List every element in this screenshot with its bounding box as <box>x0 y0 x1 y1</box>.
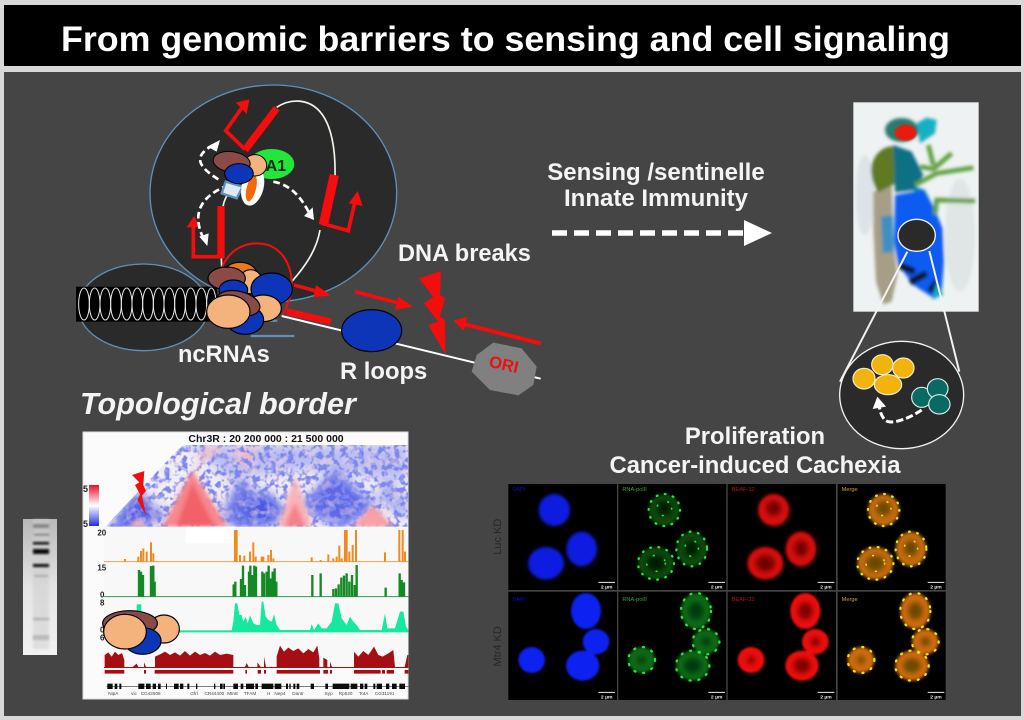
lightning bolt on map <box>132 471 146 516</box>
panel background <box>83 432 408 699</box>
colour scale: 5 <box>83 519 88 529</box>
colour scale <box>83 484 99 529</box>
gene names: MtnE <box>227 691 238 696</box>
chromatin fibre coil <box>76 287 217 322</box>
gene names: Nep4 <box>274 691 286 696</box>
colour scale: 5 <box>83 484 88 494</box>
row 2: RNA-polII: 2 µm <box>711 694 723 700</box>
ORI origin marker <box>472 343 537 395</box>
gene names: Rp520 <box>339 691 353 696</box>
protein complex overlay <box>103 611 179 654</box>
row 2: DAPI: DAPI <box>512 597 526 603</box>
gene names: vic <box>131 691 138 696</box>
gene names: Gfrl <box>190 691 198 696</box>
teal signal track: 0 <box>100 625 105 634</box>
promoter arrow right <box>322 175 363 231</box>
dashed arrows in loop <box>198 140 314 246</box>
promoter arrow top <box>226 99 277 150</box>
panel: immunofluorescence micrographs <box>492 484 946 700</box>
inset circle <box>840 341 964 449</box>
label: ncRNAs: ncRNAs <box>178 342 270 368</box>
row 1: DAPI: 2 µm <box>601 584 613 590</box>
genomic coordinates heading: Chr3R : 20 200 000 : 21 500 000 <box>188 433 344 445</box>
label: DNA breaks: DNA breaks <box>398 241 531 267</box>
label: R loops: R loops <box>340 358 427 385</box>
row 1: DAPI <box>508 484 617 590</box>
orange signal track: 20 <box>97 528 107 537</box>
teal signal track <box>100 598 408 642</box>
panel: gel image <box>23 519 57 655</box>
panel: Hi-C and genomic tracks <box>83 432 410 699</box>
gene names: CG31191 <box>375 691 395 696</box>
green signal track: 15 <box>97 563 107 572</box>
gene names: TFAM <box>244 691 256 696</box>
label: cancer-induced cachexia: Cancer-induced Cachexia <box>610 452 901 479</box>
row 2: DAPI: 2 µm <box>601 694 613 700</box>
green signal track <box>97 563 408 600</box>
heading: topological border: Topological border <box>80 387 358 421</box>
orange signal track <box>97 528 408 562</box>
row labels: Mtr4 KD <box>492 626 504 666</box>
row 2: Merge <box>838 592 946 700</box>
gene names: Syp <box>325 691 333 696</box>
row 2: DAPI <box>508 592 617 700</box>
red arrows towards break <box>294 285 541 343</box>
Hi-C heat map <box>100 445 410 532</box>
row 1: RNA-polII: RNA-polII <box>622 487 647 493</box>
R loop blue ellipse <box>342 310 402 352</box>
label: sensing: Sensing /sentinelle <box>547 159 765 186</box>
yellow cells <box>853 355 914 395</box>
red RNA arc <box>222 243 292 317</box>
row 2: RNA-polII: RNA-polII <box>622 597 647 603</box>
DNA loop strand <box>221 101 335 282</box>
row 2: BEAF-32: BEAF-32 <box>732 597 755 603</box>
row 2: BEAF-32: 2 µm <box>820 694 832 700</box>
row 1: BEAF-32: BEAF-32 <box>732 487 755 493</box>
upper protein complex: A1 <box>266 158 286 175</box>
row 2: Merge: Merge <box>842 597 858 603</box>
tracks and annotation <box>97 471 408 696</box>
row 1: RNA-polII: 2 µm <box>711 584 723 590</box>
label: proliferation: Proliferation <box>685 423 825 450</box>
gene names: TotA <box>359 691 369 696</box>
row labels: Luc KD <box>492 519 504 555</box>
upper protein complex <box>212 149 294 208</box>
red thick gene segment <box>287 312 331 322</box>
gene names: NipA <box>108 691 119 696</box>
panel: genomic looping diagram <box>76 85 541 395</box>
label: innate immunity: Innate Immunity <box>564 185 749 212</box>
gene names: Dantr <box>292 691 304 696</box>
gene models <box>107 684 408 689</box>
title: From genomic barriers to sensing and cell signaling <box>61 20 950 59</box>
teal signal track: 6 <box>100 633 105 642</box>
ORI origin marker: ORI <box>487 352 520 377</box>
row 2: RNA-polII <box>618 592 726 700</box>
loop domain circle <box>150 85 397 302</box>
panel: fly with inset <box>840 102 979 449</box>
differentiation dashed arrow <box>873 397 922 422</box>
dark red signal track <box>104 646 408 674</box>
row 1: Merge: 2 µm <box>930 584 942 590</box>
arrow: dashed to fly <box>552 220 772 246</box>
insulated domain ellipse <box>78 264 208 351</box>
ncRNA marks <box>251 321 294 336</box>
lower protein complex <box>207 262 292 334</box>
row 1: Merge: Merge <box>842 487 858 493</box>
row 1: DAPI: DAPI <box>512 487 526 493</box>
row 2: BEAF-32 <box>728 592 836 700</box>
row 1: BEAF-32 <box>728 484 836 590</box>
row 1: Merge <box>838 484 946 590</box>
abdomen cell marker <box>898 219 935 251</box>
teal signal track: 8 <box>100 598 105 607</box>
row 2: Merge: 2 µm <box>930 694 942 700</box>
fly photograph <box>853 102 979 312</box>
row 1: BEAF-32: 2 µm <box>820 584 832 590</box>
row 1: RNA-polII <box>618 484 726 590</box>
zoom lines <box>840 251 959 382</box>
gene names <box>108 691 395 696</box>
lightning bolt <box>419 271 445 354</box>
green signal track: 0 <box>100 591 105 600</box>
row labels <box>492 519 504 666</box>
gene names: CR44400 <box>204 691 225 696</box>
promoter arrow left <box>187 206 222 258</box>
gene names: CG42608 <box>141 691 161 696</box>
gene names: H <box>267 691 270 696</box>
DNA strand to ORI <box>282 316 541 379</box>
teal cells <box>912 379 950 414</box>
